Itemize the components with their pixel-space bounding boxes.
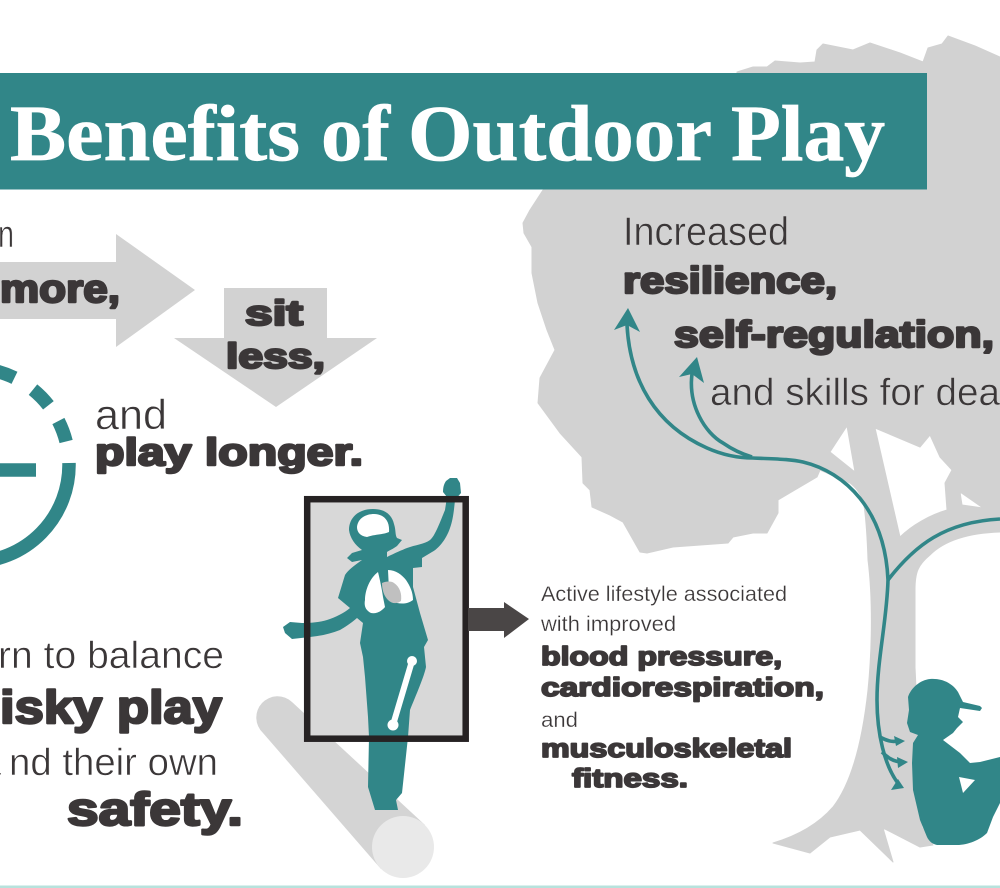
title word: Benefits: Benefits bbox=[10, 91, 300, 178]
text: health outcomes bbox=[540, 583, 824, 793]
tree silhouette bbox=[523, 36, 1000, 862]
text: risky: isky play bbox=[0, 681, 222, 733]
arrow: sit less bbox=[174, 288, 377, 407]
text: sit: sit bbox=[245, 294, 303, 333]
organ: lungs bbox=[365, 570, 413, 613]
title word: Outdoor: Outdoor bbox=[408, 91, 712, 178]
text: nd their own: nd their own bbox=[9, 742, 218, 784]
child silhouette balancing bbox=[283, 478, 461, 810]
text: fitness: fitness. bbox=[572, 763, 688, 793]
child sitting under tree bbox=[907, 679, 1000, 845]
text: risky play bbox=[0, 635, 243, 835]
bottom rule bbox=[0, 886, 1000, 888]
text: play longer: play longer. bbox=[95, 432, 363, 474]
text: safety: safety. bbox=[67, 783, 243, 835]
text: self-regulation: self-regulation, bbox=[674, 314, 994, 355]
text: and play longer: and bbox=[95, 391, 167, 438]
arrows: tree flow lines bbox=[627, 325, 1000, 782]
text: more: more, bbox=[0, 268, 120, 311]
text: cardiorespiration: cardiorespiration, bbox=[541, 672, 824, 702]
text: risky play: rn to balance bbox=[0, 635, 224, 677]
organ: femur bone bbox=[388, 656, 417, 730]
text: resilience: resilience, bbox=[623, 260, 837, 301]
text: resilience block bbox=[623, 210, 1000, 414]
title word: Play: Play bbox=[731, 91, 885, 178]
text: and play longer bbox=[95, 391, 363, 474]
icon: stopwatch ring bbox=[0, 368, 69, 562]
arrowheads bbox=[614, 308, 908, 790]
text: with improved: with improved bbox=[540, 613, 676, 636]
frame background bbox=[307, 499, 466, 739]
black frame bbox=[307, 499, 466, 739]
balance log bbox=[256, 696, 434, 878]
text: less: less, bbox=[226, 337, 325, 376]
text: resilience block: Increased bbox=[623, 210, 789, 254]
title word: of: of bbox=[321, 91, 392, 178]
log end bbox=[372, 816, 434, 878]
arrow: to health outcomes bbox=[468, 602, 529, 638]
text: and: and bbox=[541, 709, 578, 732]
text: health outcomes: Active lifestyle associated bbox=[541, 583, 787, 606]
title banner bbox=[0, 73, 927, 190]
organ: brain bbox=[357, 514, 389, 537]
text: musculoskeletal: musculoskeletal bbox=[541, 733, 792, 763]
text: skills: and skills for dea bbox=[710, 372, 1000, 414]
arrow: move more bbox=[0, 234, 195, 347]
text: blood pressure: blood pressure, bbox=[541, 641, 782, 671]
organ: heart bbox=[382, 582, 401, 603]
